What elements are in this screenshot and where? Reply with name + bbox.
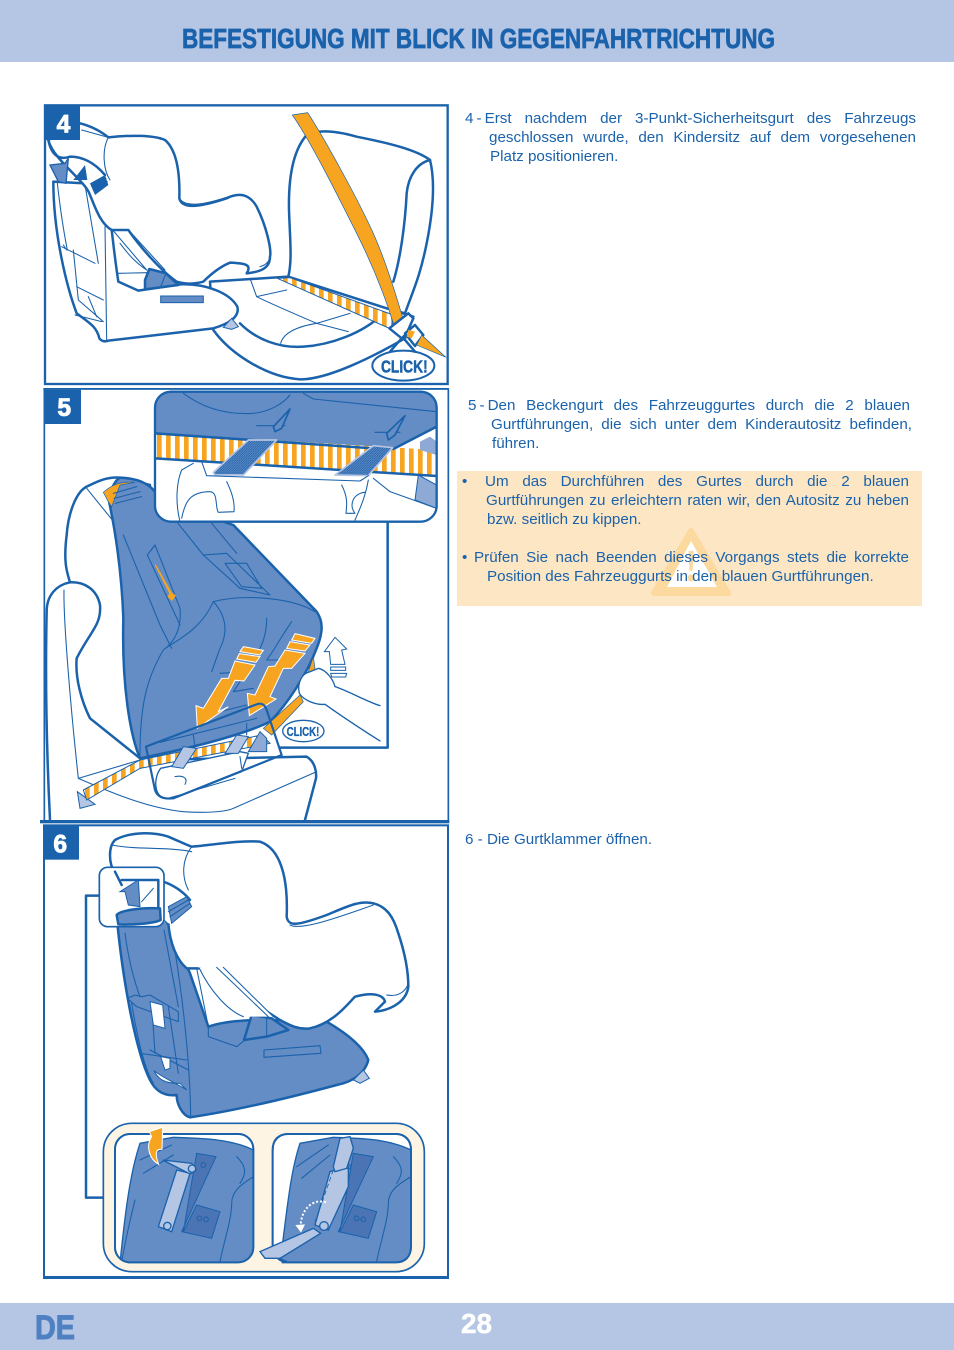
- child seat shell step 6: [117, 909, 369, 1117]
- lap belt step 5: [83, 735, 270, 800]
- language label: DE: [35, 1309, 75, 1347]
- step number 6: 6: [53, 831, 67, 858]
- text: step 5 instructions: führen.: [492, 435, 539, 452]
- warning box background: [457, 471, 922, 606]
- detail left: belt clip closed: [115, 1134, 253, 1263]
- title: BEFESTIGUNG MIT BLICK IN GEGENFAHRTRICHTUNG: [182, 23, 775, 54]
- text: step 4 instructions: nachdem der 3-Punkt-Sicherheitsgurt des Fahrzeugs: [525, 110, 916, 127]
- step number 4: [44, 106, 80, 140]
- icon: warning triangle: [654, 531, 728, 593]
- header band: [0, 0, 954, 62]
- text: warning notes: [462, 473, 909, 585]
- click bubble step 5: [283, 720, 324, 742]
- page number: 28: [461, 1308, 492, 1339]
- hand: [299, 668, 380, 741]
- step number 5: 5: [57, 395, 71, 422]
- click bubble step 5: CLICK!: [287, 725, 319, 739]
- orange down arrows: [196, 634, 315, 728]
- callout frame: [280, 520, 388, 748]
- icon: orange curved arrow: [149, 1127, 163, 1164]
- text: warning notes: Gurtführungen zu erleichtern raten wir, den Autositz zu heben: [486, 492, 909, 509]
- text: step 5 instructions: Beckengurt des Fahrzeuggurtes durch die 2 blauen: [526, 397, 910, 414]
- detail right: belt clip open: [260, 1134, 411, 1263]
- panel: step 5 illustration: [44, 389, 448, 823]
- shoulder belt: [292, 113, 404, 332]
- step number 5: [44, 390, 81, 424]
- text: warning notes: •: [462, 549, 467, 566]
- text: step 4 instructions: geschlossen wurde, den Kindersitz auf dem vorgesehenen: [489, 129, 916, 146]
- step number 6: [44, 826, 79, 860]
- text: step 4 instructions: [465, 110, 916, 165]
- white seat base under the shell: [156, 752, 248, 798]
- panel: step 6 illustration: [40, 820, 449, 1279]
- text: step 4 instructions: Platz positionieren.: [490, 148, 618, 165]
- child seat cushion step 4: [48, 123, 270, 284]
- text: step 5 instructions: 5 - Den: [468, 397, 515, 414]
- vehicle seat step 5: [46, 478, 317, 820]
- belt end: [77, 792, 95, 808]
- connector line: [86, 896, 103, 1198]
- text: warning notes: •: [462, 473, 467, 490]
- text: warning notes: Position des Fahrzeuggurts in den blauen Gurtführungen.: [487, 568, 874, 585]
- child seat cushion step 6: [110, 833, 408, 1029]
- click bubble: CLICK!: [381, 356, 428, 376]
- text: step 5 instructions: [468, 397, 912, 452]
- text: step 4 instructions: 4 - Erst: [465, 110, 512, 127]
- buckle: [389, 313, 446, 357]
- text: step 6 instructions: 6 - Die Gurtklammer öffnen.: [465, 831, 652, 848]
- text: warning notes: bzw. seitlich zu kippen.: [487, 511, 642, 528]
- zoom callout top: [99, 867, 164, 927]
- up arrow: [324, 637, 347, 677]
- inset: belt guides detail: [155, 392, 437, 522]
- step number 4: 4: [57, 111, 71, 138]
- panel: step 4 illustration: [43, 105, 448, 390]
- click bubble: [372, 338, 434, 381]
- footer band: [0, 1303, 954, 1350]
- small callout on seat base: [146, 704, 282, 799]
- child seat base step 4: [53, 182, 238, 341]
- text: step 5 instructions: Gurtführungen, die sich unter dem Kinderautositz befinden,: [491, 416, 912, 433]
- detail inset panel: [103, 1123, 424, 1272]
- harness clip step 4: [48, 140, 105, 183]
- text: warning notes: Um das Durchführen des Gurtes durch die 2 blauen: [485, 473, 909, 490]
- text: warning notes: Prüfen Sie nach Beenden dieses Vorgangs stets die korrekte: [474, 549, 909, 566]
- child seat shell step 5: [103, 478, 322, 758]
- orange belt right of shell: [263, 695, 303, 735]
- vehicle seat step 4: [210, 131, 433, 379]
